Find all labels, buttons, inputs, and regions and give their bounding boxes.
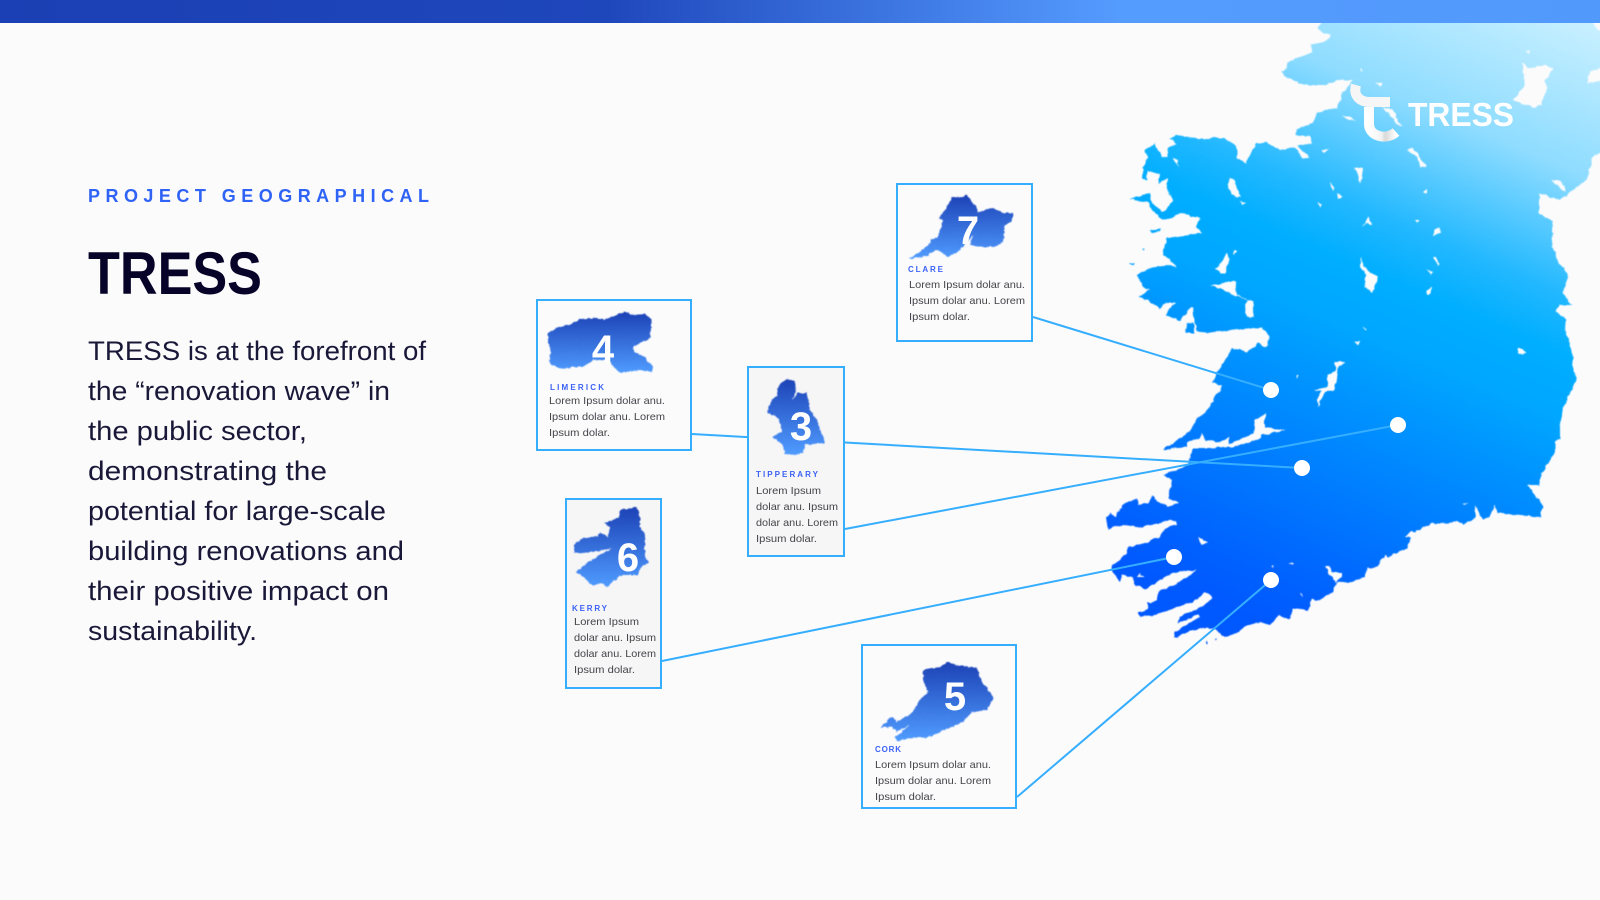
panel: Cork <box>862 645 1016 808</box>
description paragraph <box>88 336 427 646</box>
body text: Lorem Ipsum dolar anu. <box>549 395 665 407</box>
icon: Cork county map <box>880 662 994 741</box>
description paragraph: building renovations and <box>88 536 404 566</box>
description paragraph: potential for large-scale <box>88 496 386 526</box>
icon: Tipperary county map <box>767 378 825 455</box>
body text: Ipsum dolar. <box>756 533 817 545</box>
marker dot: Tipperary <box>1390 417 1406 433</box>
body text: Ipsum dolar anu. Lorem <box>875 775 991 787</box>
label: TIPPERARY <box>756 470 819 479</box>
label: CORK <box>875 745 901 754</box>
title: TRESS <box>88 240 262 307</box>
marker dot: Limerick <box>1294 460 1310 476</box>
description paragraph: TRESS is at the forefront of <box>88 336 427 366</box>
intro text block <box>88 186 429 646</box>
body text: Ipsum dolar anu. Lorem <box>909 295 1025 307</box>
body text: dolar anu. Ipsum <box>574 632 656 644</box>
top gradient bar <box>0 0 1600 23</box>
marker dot: Clare <box>1263 382 1279 398</box>
body text: Ipsum dolar anu. Lorem <box>549 411 665 423</box>
marker dot: Cork <box>1263 572 1279 588</box>
connector: Limerick to map <box>692 434 1302 468</box>
panel: Tipperary <box>748 367 844 556</box>
connector: Kerry to map <box>662 557 1174 661</box>
label: CLARE <box>908 265 944 274</box>
number 7: 7 <box>957 209 979 253</box>
body text: Lorem Ipsum <box>574 616 639 628</box>
label: LIMERICK <box>550 383 604 392</box>
kicker: PROJECT GEOGRAPHICAL <box>88 186 429 206</box>
body text <box>574 616 656 676</box>
connector: Cork to map <box>1017 580 1271 797</box>
logo mark <box>1355 85 1396 137</box>
label: KERRY <box>572 604 608 613</box>
body text: dolar anu. Lorem <box>756 517 838 529</box>
number 5: 5 <box>944 675 966 719</box>
panel: Clare <box>897 184 1032 341</box>
body text: Lorem Ipsum <box>756 485 821 497</box>
body text <box>756 485 838 545</box>
number 3: 3 <box>790 405 812 449</box>
description paragraph: demonstrating the <box>88 456 327 486</box>
body text <box>875 759 991 803</box>
description paragraph: the public sector, <box>88 416 307 446</box>
logo wordmark: TRESS <box>1408 96 1514 133</box>
connector: Clare to map <box>1033 317 1271 390</box>
body text: Ipsum dolar. <box>875 791 936 803</box>
connector: Tipperary to map <box>845 425 1398 529</box>
body text: Ipsum dolar. <box>549 427 610 439</box>
body text: Ipsum dolar. <box>909 311 970 323</box>
icon: Limerick county map <box>548 312 653 373</box>
body text: Ipsum dolar. <box>574 664 635 676</box>
map landmass <box>1106 16 1600 638</box>
body text <box>549 395 665 439</box>
body text: Lorem Ipsum dolar anu. <box>875 759 991 771</box>
body text <box>909 279 1025 323</box>
body text: dolar anu. Ipsum <box>756 501 838 513</box>
panel: Kerry <box>566 499 661 688</box>
logo: TRESS <box>1355 85 1514 137</box>
icon: Kerry county map <box>574 507 649 588</box>
description paragraph: their positive impact on <box>88 576 389 606</box>
body text: dolar anu. Lorem <box>574 648 656 660</box>
map: Ireland with location markers <box>1106 16 1600 644</box>
map lakes and inlets <box>1138 50 1566 597</box>
panel: Limerick <box>537 300 691 450</box>
icon: Clare county map <box>908 195 1013 259</box>
marker dot: Kerry <box>1166 549 1182 565</box>
body text: Lorem Ipsum dolar anu. <box>909 279 1025 291</box>
map small islands <box>1129 229 1217 644</box>
number 6: 6 <box>617 536 639 580</box>
description paragraph: the “renovation wave” in <box>88 376 390 406</box>
description paragraph: sustainability. <box>88 616 257 646</box>
number 4: 4 <box>592 328 615 372</box>
